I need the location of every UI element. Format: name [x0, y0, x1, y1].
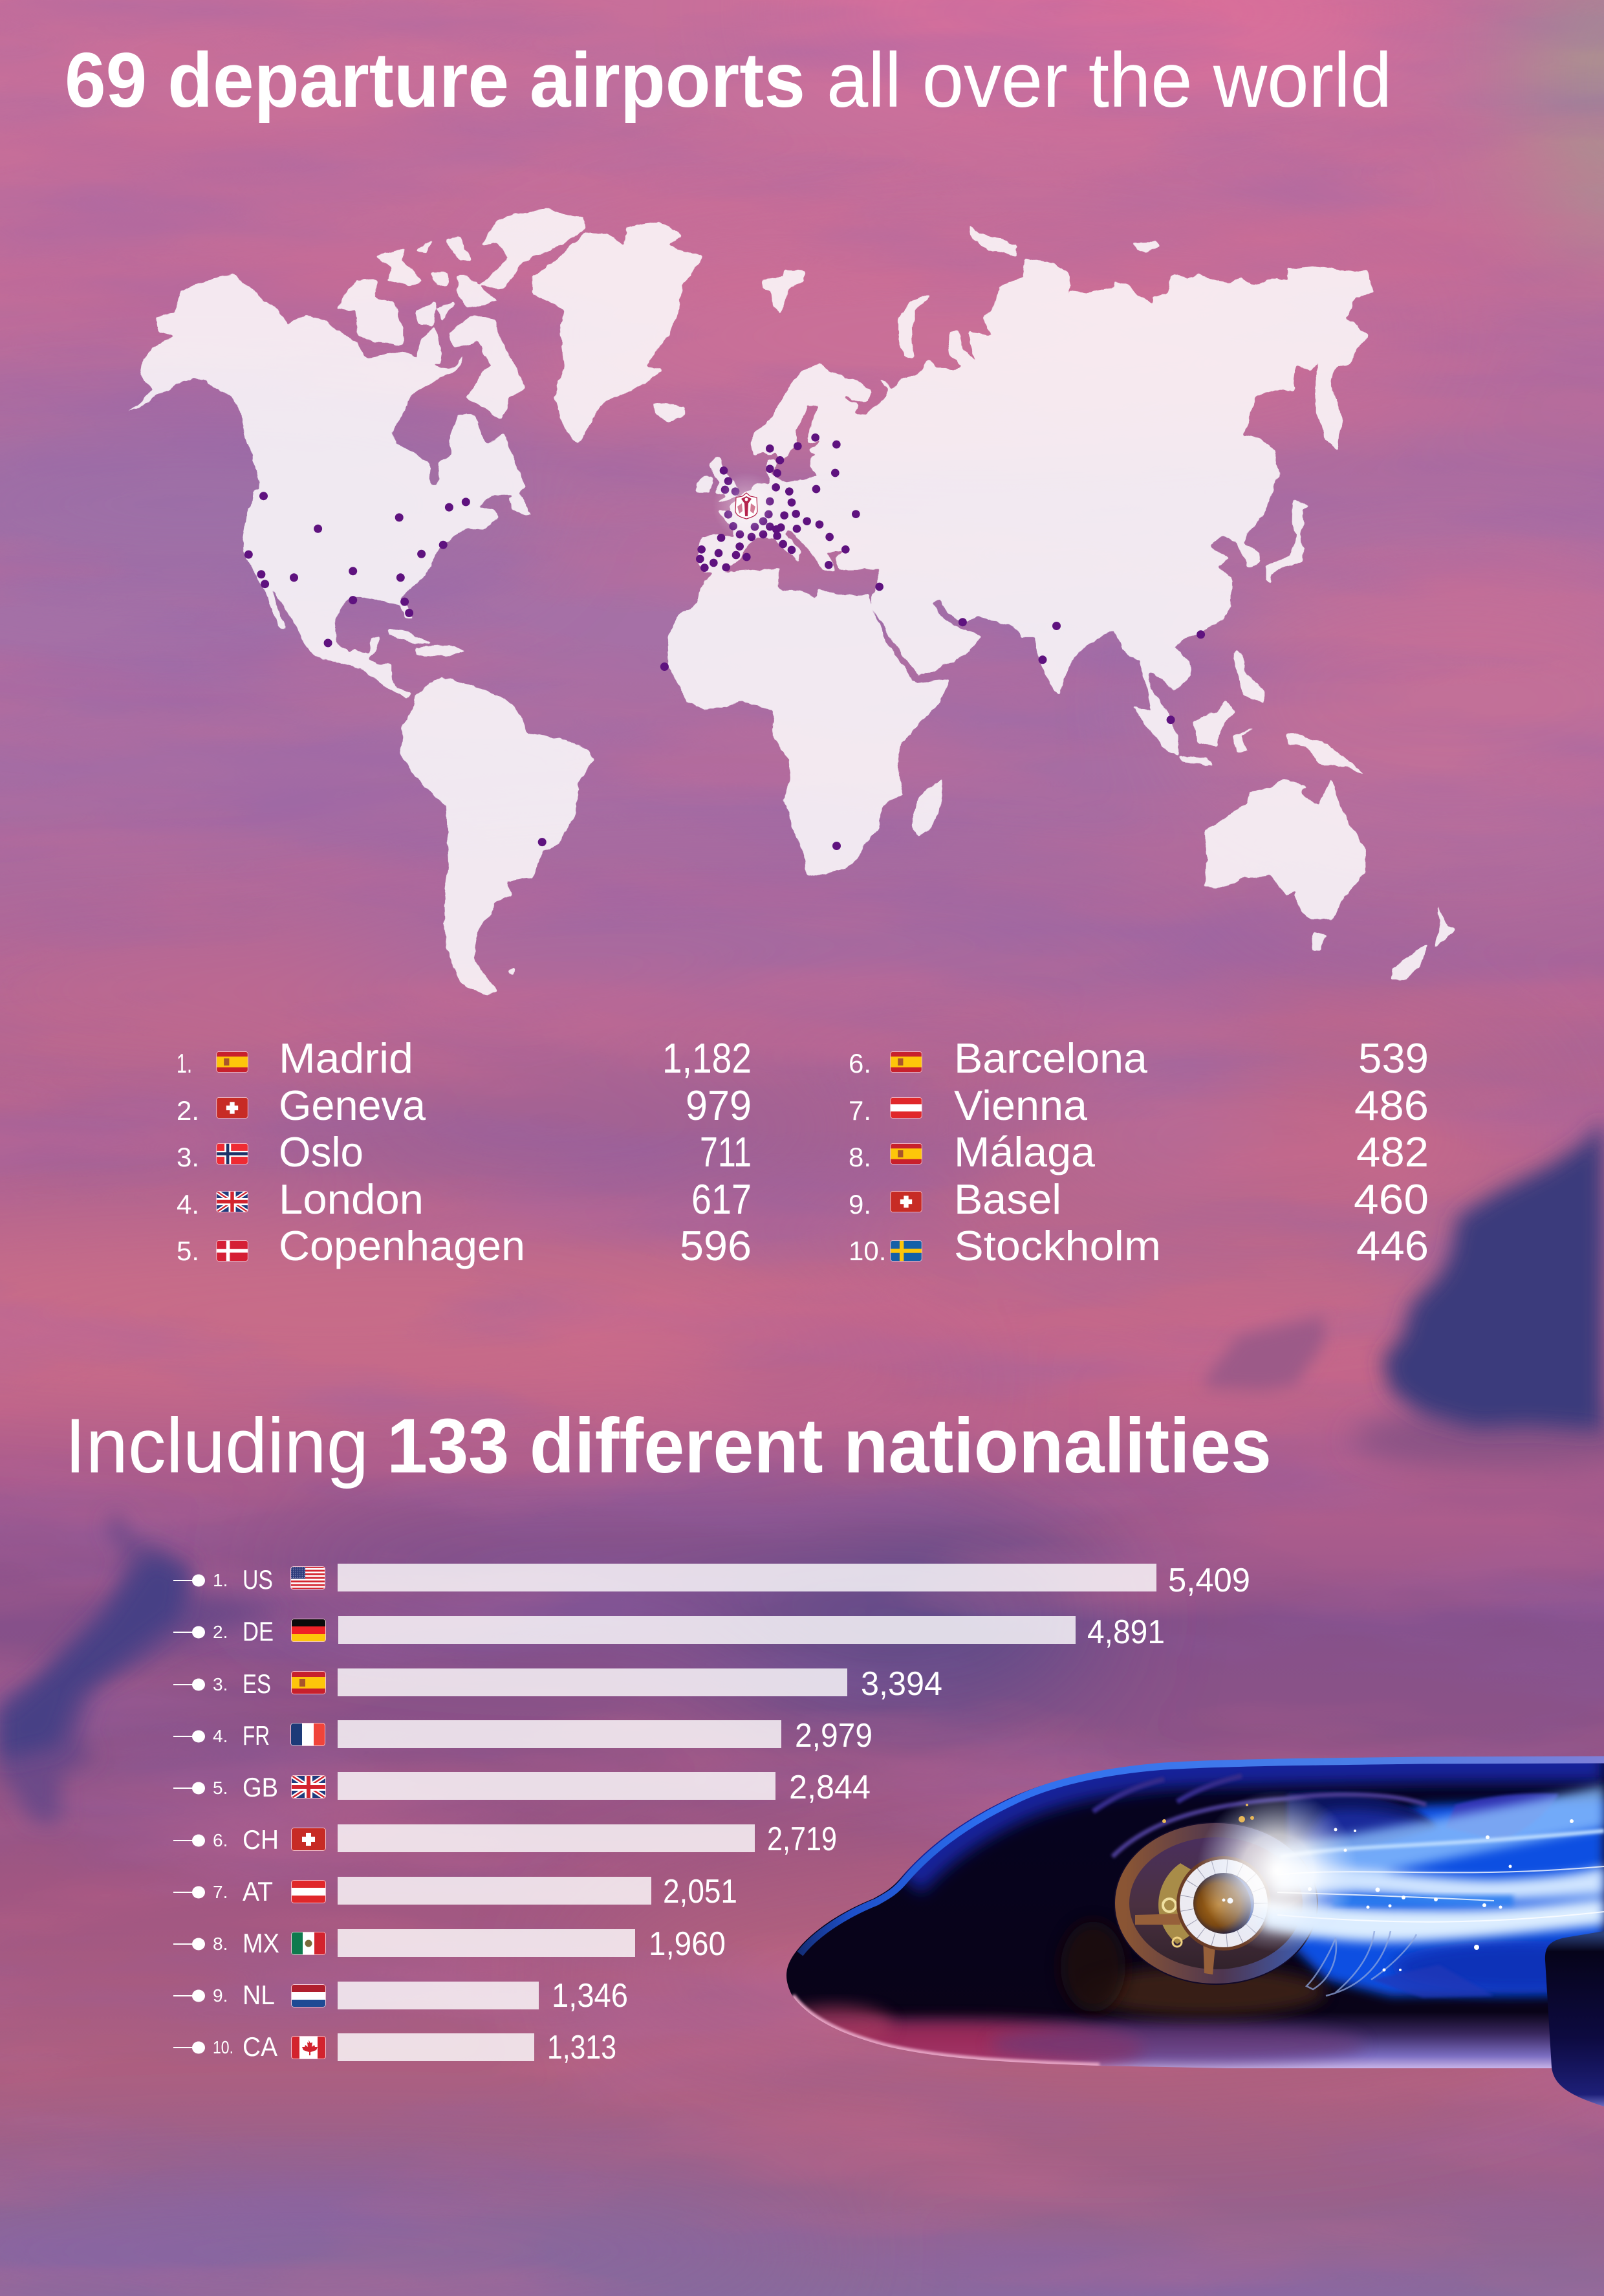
row: 8 Malaga: Málaga [954, 1128, 1096, 1175]
row: 8 Malaga: 8. [849, 1142, 871, 1172]
bar row: 3 ES: ES [243, 1668, 271, 1699]
icon: festival logo shield with glow [713, 472, 780, 540]
bar row: 1 US: 5,409 [1168, 1562, 1250, 1599]
bar row: 3 ES: 3,394 [861, 1665, 942, 1703]
row: 10 Stockholm [849, 1222, 1429, 1269]
bar row: 5 GB: 2,844 [789, 1769, 871, 1806]
row: 10 Stockholm: 446 [1356, 1222, 1429, 1269]
plane top rim light [800, 1760, 1604, 1954]
land: Americas and Greenland [124, 208, 703, 996]
bar row: 4 FR: FR [243, 1720, 270, 1751]
row: 3 Oslo [177, 1128, 752, 1175]
row: 2 Geneva [177, 1082, 752, 1129]
row: 1 Madrid: 1. [177, 1048, 192, 1078]
bar row: 6 CH [173, 1820, 837, 1858]
list: top departure airports, left column [177, 1034, 752, 1269]
row: 5 Copenhagen: 5. [177, 1236, 199, 1266]
bar row: 8 MX: 8. [213, 1934, 228, 1954]
fuselage lighting and eye artwork [731, 1756, 1604, 2075]
bar row: 7 AT [173, 1873, 737, 1910]
row: 1 Madrid: 1,182 [662, 1034, 752, 1082]
row: 2 Geneva: Geneva [279, 1082, 426, 1129]
bar row: 2 DE: 2. [213, 1622, 228, 1642]
land masses [124, 208, 1455, 996]
row: 9 Basel [849, 1175, 1429, 1223]
row: 5 Copenhagen: Copenhagen [279, 1222, 525, 1269]
row: 10 Stockholm: Stockholm [954, 1222, 1161, 1269]
bar row: 2 DE: 4,891 [1087, 1613, 1165, 1651]
row: 2 Geneva: 979 [686, 1082, 752, 1129]
bar row: 7 AT: 2,051 [663, 1873, 737, 1910]
bar row: 6 CH: CH [243, 1824, 279, 1855]
title: 69 departure airports: 69 departure airports [65, 37, 805, 124]
bar row: 9 NL: NL [243, 1980, 275, 2010]
bar row: 3 ES [173, 1665, 942, 1703]
bar row: 10 CA: CA [243, 2031, 277, 2062]
row: 4 London: 617 [691, 1175, 752, 1223]
row: 6 Barcelona: 6. [849, 1048, 871, 1078]
bar row: 8 MX: MX [243, 1928, 279, 1958]
row: 8 Malaga [849, 1128, 1429, 1175]
row: 10 Stockholm: 10. [849, 1236, 886, 1266]
bar row: 2 DE [173, 1613, 1165, 1651]
bar row: 4 FR: 4. [213, 1726, 228, 1746]
bar row: 5 GB: 5. [213, 1778, 228, 1798]
row: 8 Malaga: 482 [1356, 1128, 1429, 1175]
bar row: 10 CA: 1,313 [547, 2029, 616, 2066]
bar row: 1 US: 1. [213, 1570, 228, 1590]
bar row: 1 US [173, 1562, 1250, 1599]
row: 4 London [177, 1175, 752, 1223]
bar row: 9 NL [173, 1977, 628, 2015]
title: 69 departure airports [65, 37, 1392, 124]
row: 7 Vienna [849, 1082, 1429, 1129]
title: 69 departure airports: all over the world [827, 37, 1392, 124]
bar row: 5 GB: GB [243, 1772, 278, 1802]
bar row: 8 MX [173, 1925, 726, 1963]
bar row: 6 CH: 2,719 [767, 1820, 837, 1858]
row: 3 Oslo: 3. [177, 1142, 199, 1172]
row: 2 Geneva: 2. [177, 1095, 199, 1126]
bar row: 7 AT: 7. [213, 1882, 228, 1902]
bar row: 3 ES: 3. [213, 1674, 228, 1694]
row: 4 London: London [279, 1175, 424, 1223]
illustration: airplane with mechanical eye [731, 1756, 1604, 2106]
airport dots: world [244, 492, 1205, 850]
bar row: 5 GB [173, 1769, 871, 1806]
airport dots: Europe [696, 433, 883, 591]
row: 9 Basel: 460 [1354, 1175, 1429, 1223]
bar row: 7 AT: AT [243, 1876, 273, 1907]
row: 9 Basel: 9. [849, 1189, 871, 1219]
bar row: 10 CA [173, 2029, 616, 2066]
row: 5 Copenhagen [177, 1222, 752, 1269]
world map [124, 208, 1455, 996]
row: 1 Madrid: Madrid [279, 1034, 413, 1082]
row: 5 Copenhagen: 596 [680, 1222, 752, 1269]
plane fuselage [786, 1756, 1604, 2068]
bar row: 4 FR [173, 1717, 872, 1755]
bar row: 2 DE: DE [243, 1616, 274, 1646]
bar row: 8 MX: 1,960 [649, 1925, 726, 1963]
row: 6 Barcelona: Barcelona [954, 1034, 1148, 1082]
bar row: 4 FR: 2,979 [795, 1717, 872, 1755]
row: 3 Oslo: 711 [700, 1128, 752, 1175]
row: 3 Oslo: Oslo [279, 1128, 363, 1175]
row: 7 Vienna: 7. [849, 1095, 871, 1126]
row: 1 Madrid [177, 1034, 752, 1082]
bar row: 1 US: US [243, 1564, 273, 1595]
row: 9 Basel: Basel [954, 1175, 1061, 1223]
bar row: 6 CH: 6. [213, 1830, 228, 1850]
list: top departure airports, right column [849, 1034, 1429, 1269]
heading: 133 different nationalities: Including [65, 1403, 369, 1489]
row: 7 Vienna: 486 [1354, 1082, 1429, 1129]
bar row: 10 CA: 10. [213, 2037, 233, 2057]
row: 6 Barcelona [849, 1034, 1429, 1082]
bar chart: nationalities [173, 1562, 1250, 2066]
bar row: 9 NL: 9. [213, 1985, 228, 2006]
row: 6 Barcelona: 539 [1358, 1034, 1429, 1082]
bar row: 9 NL: 1,346 [552, 1977, 628, 2015]
heading: 133 different nationalities: 133 different nationalities [387, 1403, 1272, 1489]
row: 4 London: 4. [177, 1189, 199, 1219]
land: Eurasia, Africa, Oceania [653, 224, 1455, 980]
row: 7 Vienna: Vienna [954, 1082, 1088, 1129]
plane engine [1545, 1931, 1604, 2106]
